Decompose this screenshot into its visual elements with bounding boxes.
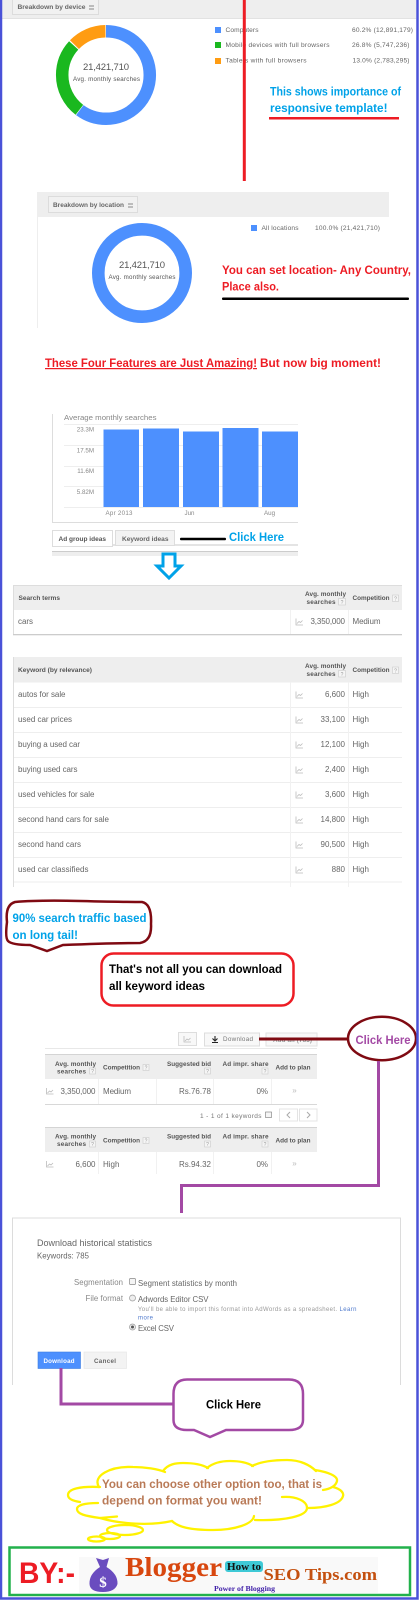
callout: download keyword ideas: That's not all you can download (109, 962, 282, 976)
note: set location: You can set location- Any Country, (222, 263, 411, 277)
legend: device share: 26.8% (5,747,236) (352, 42, 410, 49)
callout: click here oval (348, 1017, 416, 1060)
dialog: download historical statistics: Keywords: 785 (37, 1252, 90, 1260)
legend: location share: All locations (262, 225, 299, 232)
legend: device share: 13.0% (2,783,295) (352, 58, 410, 64)
donut chart: device share (62, 31, 150, 119)
thought cloud: format option: depend on format you want! (102, 1494, 262, 1508)
table row: keyword: 6,600 (75, 1160, 96, 1169)
tabs: ad group and keyword ideas: Ad group ideas (58, 536, 106, 543)
table: search terms: 3,350,000 (310, 617, 346, 626)
rows: competition: High (352, 740, 369, 749)
logo wordmark: SEO Tips.com (264, 1565, 377, 1584)
table head: keyword: searches (57, 1141, 86, 1148)
dialog: download historical statistics: Segmentation (74, 1278, 123, 1287)
button: download: Download (223, 1036, 253, 1043)
table head: keyword (45, 1127, 317, 1152)
rows: keyword names: buying a used car (18, 740, 80, 749)
table: search terms: cars (18, 617, 33, 626)
table row: keyword: » (292, 1159, 297, 1168)
table head: keyword: Suggested bid (167, 1134, 211, 1140)
connector: oval to dialog (182, 1061, 378, 1213)
table row: keyword: 0% (256, 1160, 268, 1169)
bar chart: average monthly searches (52, 413, 298, 523)
table: keyword ideas: searches (306, 671, 336, 678)
dropdown: breakdown by location (48, 196, 138, 212)
bar chart: average monthly searches: 11.6M (77, 468, 94, 475)
table head: search term (45, 1054, 317, 1079)
table head: keyword: Add to plan (276, 1138, 311, 1144)
logo wordmark: How to (227, 1562, 261, 1573)
rows: monthly searches (321, 690, 346, 874)
table head: keyword: Avg. monthly (55, 1134, 96, 1140)
button: chart (178, 1032, 196, 1046)
rows: keyword names: second hand cars for sale (18, 815, 110, 824)
legend: device share: Mobile devices with full browsers (226, 42, 330, 49)
button: download: Download (44, 1358, 75, 1365)
bar chart: average monthly searches: Aug (264, 510, 276, 517)
table row: keyword: Rs.94.32 (179, 1160, 212, 1169)
dropdown: breakdown by device (12, 0, 98, 14)
bar chart: average monthly searches: Apr 2013 (106, 510, 133, 517)
heading: four features (45, 356, 381, 370)
table head: search term: ? (206, 1069, 209, 1075)
button: add all (266, 1033, 317, 1046)
legend: device share: Computers (226, 27, 259, 34)
table head: search term: Ad impr. share (222, 1061, 269, 1068)
rows: keyword names: second hand cars (18, 840, 81, 849)
donut chart: location share: Avg. monthly searches (108, 274, 176, 281)
red vertical connector (243, 0, 246, 181)
callout: click here oval: Click Here (356, 1033, 411, 1047)
rows: monthly searches: 6,600 (325, 690, 346, 699)
rows: competition: High (352, 865, 369, 874)
rows: keyword names: used vehicles for sale (18, 790, 95, 799)
rows: trend icons (296, 692, 303, 873)
rows: competition: High (352, 790, 369, 799)
table head: keyword: ? (145, 1138, 148, 1144)
table head: search term: Avg. monthly (55, 1061, 96, 1068)
table row: search term (45, 1079, 317, 1105)
callout: click here: Click Here (206, 1398, 261, 1412)
rows: keyword names: buying used cars (18, 765, 78, 774)
button: cancel: Cancel (94, 1358, 116, 1365)
dialog: download historical statistics: You'll be able to import this format into AdWords as a spreadsheet. (138, 1307, 337, 1313)
table: search terms: Medium (352, 617, 381, 626)
table: search terms: Avg. monthly (305, 591, 346, 598)
note: responsive template (269, 84, 402, 120)
table row: search term: 0% (256, 1087, 268, 1096)
table head: keyword: Ad impr. share (222, 1134, 269, 1140)
pointer: click here keyword ideas: Click Here (229, 530, 284, 544)
table head: search term: Suggested bid (167, 1061, 211, 1068)
note: responsive template: responsive template! (270, 101, 388, 115)
table head: search term: Competition (103, 1064, 140, 1072)
table: keyword ideas: Keyword (by relevance) (18, 667, 92, 674)
logo wordmark (125, 1552, 377, 1593)
donut chart: location share (98, 229, 186, 317)
table head: keyword: ? (91, 1142, 94, 1148)
table head: keyword: Competition (103, 1138, 140, 1144)
rows: keyword names (18, 690, 110, 874)
heading: four features: These Four Features are Just Amazing! (45, 356, 257, 370)
tabs: ad group and keyword ideas (52, 530, 298, 556)
callout: download keyword ideas: all keyword ideas (109, 979, 205, 993)
note: set location: Place also. (222, 280, 279, 294)
tabs: ad group and keyword ideas: Keyword ideas (122, 536, 169, 543)
dialog: download historical statistics (12, 1218, 400, 1385)
rows: monthly searches: 12,100 (321, 740, 346, 749)
rows: monthly searches: 3,600 (325, 790, 346, 799)
table head: search term: ? (264, 1069, 267, 1075)
button: cancel (84, 1352, 126, 1368)
rows: competition (352, 690, 369, 874)
note: responsive template: This shows importance of (270, 84, 402, 98)
icon: money bag (89, 1558, 118, 1592)
table: keyword ideas: Avg. monthly (305, 663, 346, 670)
legend: device share (215, 27, 413, 64)
panel: keyword results with download (45, 1032, 317, 1174)
rows: monthly searches: 90,500 (321, 840, 346, 849)
legend: location share: 100.0% (21,421,710) (315, 225, 380, 232)
callout: long tail (6, 901, 151, 951)
donut chart: device share: Avg. monthly searches (73, 76, 140, 83)
heading: four features: But now big moment! (260, 356, 381, 370)
panel: breakdown by device (2, 0, 416, 119)
dialog: download historical statistics: Adwords Editor CSV (138, 1295, 209, 1304)
panel: breakdown by location (37, 192, 389, 328)
logo panel (79, 1552, 378, 1593)
table row: keyword (46, 1152, 297, 1174)
table head: search term: searches (57, 1068, 86, 1076)
legend: device share: Tablets with full browsers (226, 58, 307, 64)
dropdown: breakdown by location: Breakdown by location (53, 202, 124, 209)
dialog: download historical statistics: Excel CSV (138, 1324, 175, 1333)
arrow: down (157, 554, 181, 578)
rows: keyword names: used car classifieds (18, 865, 88, 874)
bar chart: average monthly searches: 5.82M (77, 489, 94, 496)
table: search terms: searches (306, 599, 336, 606)
connector: download to click here (259, 1038, 347, 1040)
table head: keyword: ? (206, 1142, 209, 1148)
dialog: download historical statistics: File format (86, 1294, 124, 1303)
callout: long tail: 90% search traffic based (12, 911, 146, 925)
table: keyword ideas: ? (341, 672, 344, 678)
button: download (38, 1352, 80, 1368)
rows: keyword names: used car prices (18, 715, 72, 724)
button: add all: Add all (785) (273, 1037, 312, 1044)
footer: byline and logo (10, 1548, 410, 1595)
dialog: download historical statistics: Learn (340, 1307, 356, 1313)
byline: BY:- (19, 1557, 75, 1590)
dropdown: breakdown by device: Breakdown by device (18, 4, 86, 11)
bar chart: average monthly searches: 17.5M (77, 448, 94, 454)
table head: keyword: ? (264, 1142, 267, 1148)
callout: long tail: on long tail! (12, 928, 78, 942)
table: keyword ideas: Competition (352, 667, 390, 674)
pagination: 1 - 1 of 1 keywords (200, 1113, 262, 1120)
bar chart: average monthly searches: Average monthly searches (64, 413, 157, 422)
logo wordmark: Power of Blogging (214, 1585, 276, 1593)
legend: location share (251, 225, 380, 232)
thought cloud: format option (68, 1460, 343, 1542)
icon: money bag: $ (99, 1575, 107, 1591)
dialog: download historical statistics: Download historical statistics (37, 1238, 152, 1248)
table head: search term: Add to plan (276, 1064, 311, 1072)
rows: keyword names: autos for sale (18, 690, 66, 699)
table row: search term: Rs.76.78 (179, 1087, 212, 1096)
dialog: download historical statistics: more (138, 1316, 154, 1322)
connector: download to callout (61, 1368, 174, 1404)
rows: competition: High (352, 765, 369, 774)
note: set location (222, 263, 411, 300)
callout: download keyword ideas (102, 954, 294, 1006)
table: keyword ideas (13, 657, 402, 887)
dialog: download historical statistics: Segment statistics by month (138, 1279, 237, 1288)
logo wordmark: Blogger (125, 1552, 222, 1582)
donut chart: location share: 21,421,710 (119, 260, 165, 271)
rows: competition: High (352, 840, 369, 849)
table: keyword ideas: ? (394, 668, 397, 674)
rows: competition: High (352, 715, 369, 724)
pointer: click here keyword ideas (180, 530, 284, 544)
table: search terms (13, 585, 402, 635)
table: search terms: Search terms (18, 595, 60, 602)
table row: search term: 3,350,000 (60, 1087, 96, 1096)
callout: click here (174, 1380, 303, 1437)
bar chart: average monthly searches: 23.3M (77, 426, 94, 434)
table row: search term: Medium (103, 1087, 131, 1096)
rows: competition: High (352, 690, 369, 699)
rows: monthly searches: 14,800 (321, 815, 346, 824)
table row: search term: » (292, 1086, 297, 1095)
rows: monthly searches: 2,400 (325, 765, 346, 774)
table row: keyword: High (103, 1160, 119, 1169)
legend: device share: 60.2% (12,891,179) (352, 27, 413, 34)
rows: monthly searches: 880 (332, 865, 346, 874)
bar chart: average monthly searches: Jun (184, 510, 195, 517)
table: search terms: ? (394, 596, 397, 602)
thought cloud: format option: You can choose other option too, that is (102, 1477, 322, 1491)
table: search terms: Competition (352, 595, 390, 602)
rows: competition: High (352, 815, 369, 824)
pagination (200, 1109, 317, 1121)
table: search terms: ? (341, 600, 344, 606)
table head: search term: ? (145, 1066, 148, 1072)
rows: monthly searches: 33,100 (321, 715, 346, 724)
donut chart: device share: 21,421,710 (83, 62, 129, 73)
button: download (204, 1033, 260, 1046)
table head: search term: ? (91, 1069, 94, 1075)
